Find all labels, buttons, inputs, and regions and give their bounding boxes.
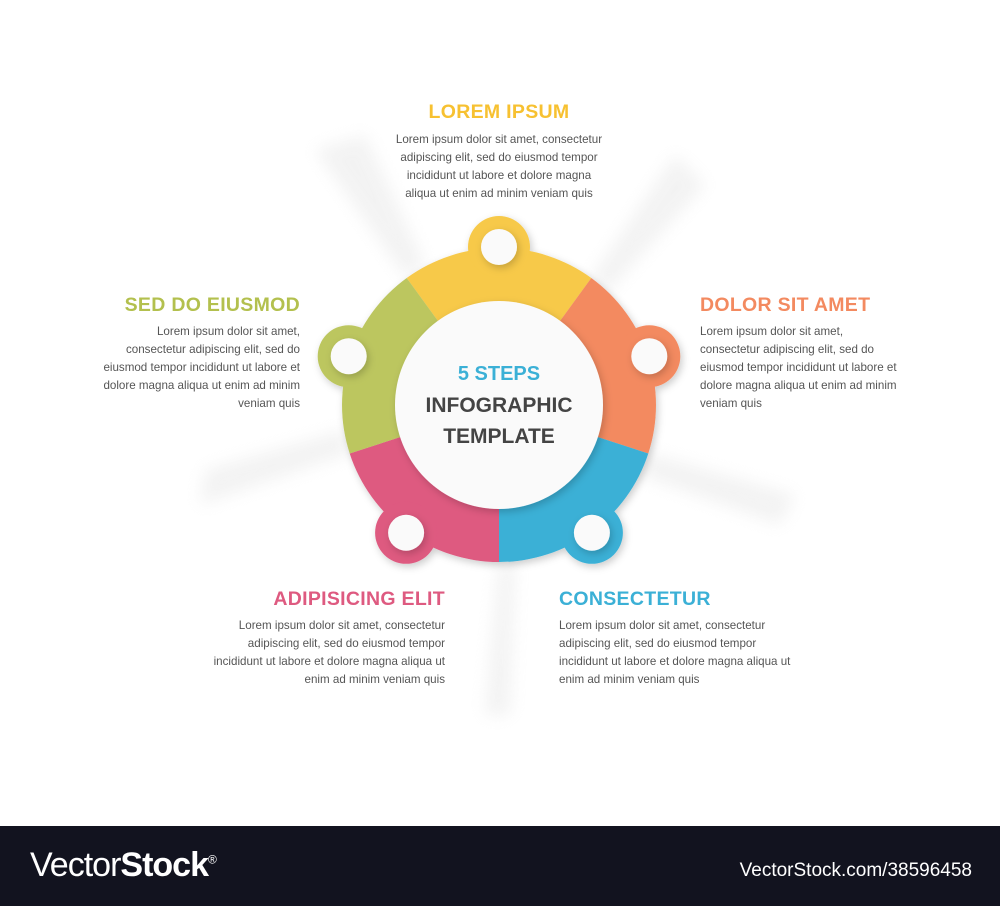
center title: 5 STEPS <box>458 363 540 385</box>
text: left: Lorem ipsum dolor sit amet, <box>157 325 300 338</box>
text: bottom right: enim ad minim veniam quis <box>559 673 699 686</box>
text: top: adipiscing elit, sed do eiusmod tempor <box>400 151 598 164</box>
text: left: dolore magna aliqua ut enim ad minim <box>103 379 300 392</box>
heading: adipisicing elit: ADIPISICING ELIT <box>273 588 445 610</box>
heading: dolor sit amet: DOLOR SIT AMET <box>700 294 870 316</box>
text: left: eiusmod tempor incididunt ut labore et <box>103 361 300 374</box>
text: right <box>700 325 897 410</box>
knob holes <box>331 229 667 551</box>
text: top: Lorem ipsum dolor sit amet, consectetur <box>396 133 602 146</box>
text: top <box>396 133 602 200</box>
text: bottom left: Lorem ipsum dolor sit amet, consectetur <box>239 619 445 632</box>
text: right: consectetur adipiscing elit, sed do <box>700 343 874 356</box>
text: left: veniam quis <box>238 397 300 410</box>
text: right: dolore magna aliqua ut enim ad minim <box>700 379 897 392</box>
text: bottom left: enim ad minim veniam quis <box>305 673 445 686</box>
text: bottom left: incididunt ut labore et dolore magna aliqua ut <box>214 655 445 668</box>
text: top: aliqua ut enim ad minim veniam quis <box>405 187 593 200</box>
text: right: eiusmod tempor incididunt ut labore et <box>700 361 897 374</box>
shadow rays <box>200 135 795 715</box>
text: bottom right: incididunt ut labore et dolore magna aliqua ut <box>559 655 790 668</box>
footer bar <box>0 826 1000 906</box>
heading: sed do eiusmod: SED DO EIUSMOD <box>125 294 300 316</box>
center title: INFOGRAPHIC <box>426 394 572 417</box>
heading: lorem ipsum: LOREM IPSUM <box>429 101 569 123</box>
center circle <box>395 301 603 509</box>
center title: TEMPLATE <box>443 425 555 448</box>
segments <box>318 216 680 564</box>
heading: consectetur: CONSECTETUR <box>559 588 711 610</box>
text: bottom left: adipiscing elit, sed do eiusmod tempor <box>248 637 445 650</box>
footer logo: VectorStock® <box>30 846 216 884</box>
text: bottom right: Lorem ipsum dolor sit amet, consectetur <box>559 619 765 632</box>
footer url: VectorStock.com/38596458 <box>740 860 972 881</box>
text: right: Lorem ipsum dolor sit amet, <box>700 325 843 338</box>
text: left <box>103 325 300 410</box>
text: right: veniam quis <box>700 397 762 410</box>
text: left: consectetur adipiscing elit, sed do <box>126 343 300 356</box>
text: bottom left <box>214 619 445 686</box>
text: bottom right: adipiscing elit, sed do eiusmod tempor <box>559 637 756 650</box>
text: top: incididunt ut labore et dolore magna <box>407 169 591 182</box>
center title <box>426 363 572 448</box>
text: bottom right <box>559 619 790 686</box>
